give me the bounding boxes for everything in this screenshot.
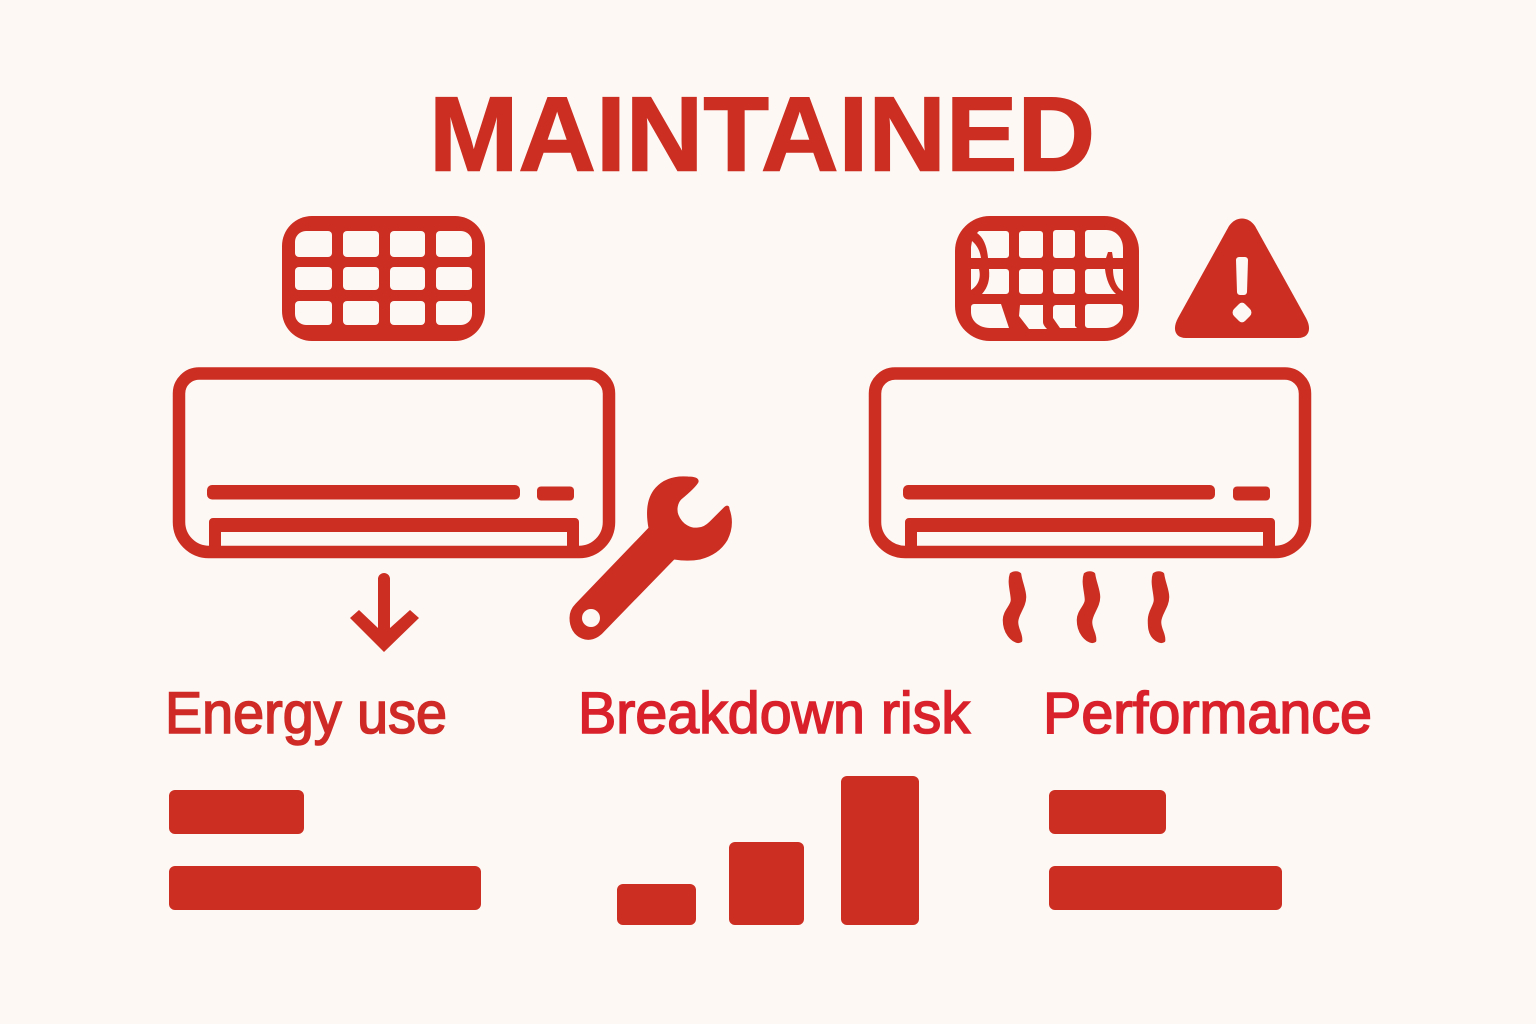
title: MAINTAINED <box>429 76 1095 194</box>
icon: warning triangle <box>1175 218 1309 338</box>
icon: worn filter <box>955 216 1139 341</box>
bar chart: energy use <box>169 790 481 910</box>
icon: maintained air conditioner <box>179 374 609 552</box>
label: energy use: Energy use <box>165 681 447 746</box>
icon: neglected air conditioner <box>875 374 1305 552</box>
bar chart: performance <box>1049 790 1282 910</box>
icon: down arrow <box>350 573 419 652</box>
icon: clean filter <box>282 216 485 341</box>
label: breakdown risk: Breakdown risk <box>578 681 971 746</box>
bar chart: breakdown risk <box>617 776 919 925</box>
icon: wrench <box>570 477 731 639</box>
icon: weak airflow waves <box>1004 572 1168 642</box>
label: performance: Performance <box>1043 681 1372 746</box>
